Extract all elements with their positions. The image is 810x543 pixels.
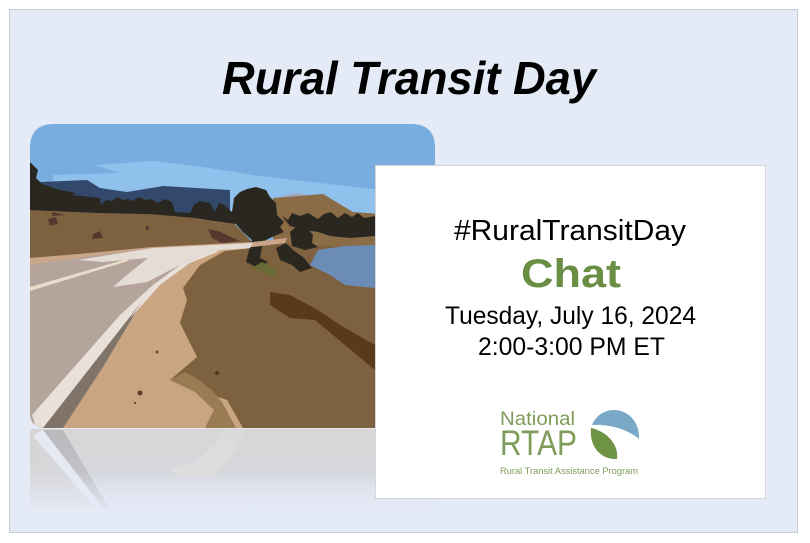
logo: National RTAP: Rural Transit Assistance Program: [500, 466, 638, 476]
title: Rural Transit Day: [222, 52, 598, 104]
photo: rural road beside a lake: [30, 124, 435, 428]
logo: National RTAP: RTAP: [500, 424, 577, 463]
photo reflection: [30, 429, 375, 506]
date: Tuesday, July 16, 2024: [445, 302, 696, 330]
white information panel: [376, 166, 766, 498]
logo: National RTAP: [500, 409, 639, 476]
logo: National RTAP: National: [500, 409, 575, 430]
chat heading: Chat: [521, 252, 621, 296]
time: 2:00-3:00 PM ET: [478, 333, 665, 361]
hashtag: #RuralTransitDay: [454, 215, 687, 247]
